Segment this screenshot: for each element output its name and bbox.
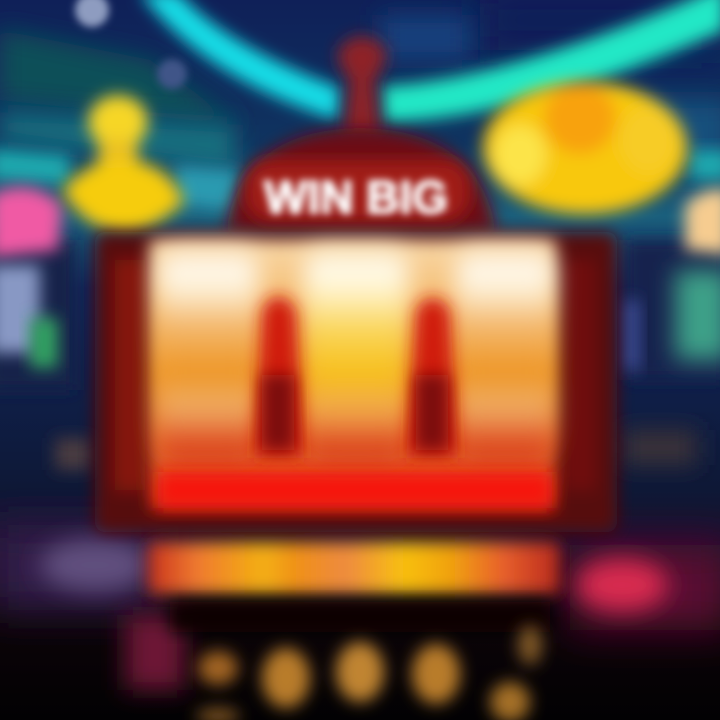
lower lights strip [148,542,560,594]
machine finial [338,36,386,135]
yellow coin cloud right [483,82,687,214]
coin tray [170,602,550,632]
machine cabinet [95,232,617,532]
machine dome [226,128,496,232]
win sign: WIN BIG [264,171,448,223]
reel right [456,248,554,463]
reels panel [150,240,555,510]
row of golden coins [196,625,542,720]
yellow trophy figure left [62,95,184,232]
cyan neon arc left [140,0,340,120]
reel divider right [406,298,458,458]
left background machine [0,187,91,470]
win sign [245,160,470,223]
floor and lower glow [0,525,720,690]
red win bar [158,472,552,508]
reel divider left [254,296,304,458]
right background machine [622,189,720,465]
reel left [158,248,258,463]
cyan neon arc right [382,0,720,122]
reel middle [304,248,408,463]
divider shadow left [262,375,294,450]
divider shadow right [416,375,448,450]
